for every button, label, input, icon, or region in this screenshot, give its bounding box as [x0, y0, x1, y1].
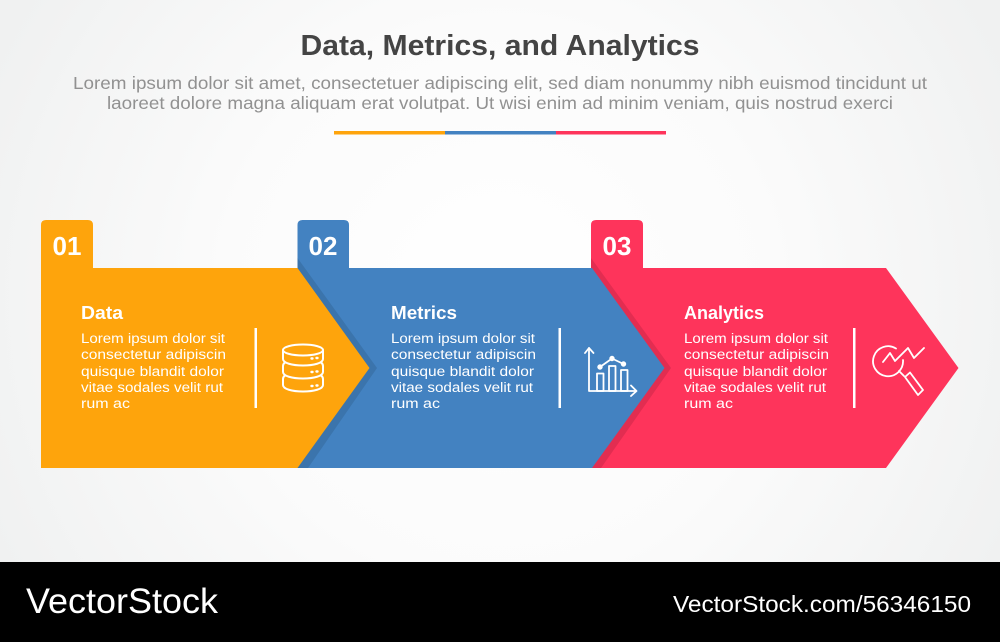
analytics arrow shadow — [591, 258, 671, 468]
analytics text block: vitae sodales velit rut — [684, 380, 826, 395]
panel: analytics arrow — [591, 220, 958, 468]
data text block: vitae sodales velit rut — [81, 380, 223, 395]
data divider — [254, 328, 257, 408]
number 03: 03 — [603, 231, 631, 261]
icon: database — [283, 344, 323, 392]
analytics heading: Analytics — [684, 303, 764, 323]
data text block: Lorem ipsum dolor sit — [81, 331, 225, 346]
subtitle text block — [73, 73, 927, 113]
subtitle text block: Lorem ipsum dolor sit amet, consectetuer adipiscing elit, sed diam nonummy nibh euismod tincidunt ut — [73, 73, 927, 93]
watermark url text: VectorStock.com/56346150 — [673, 591, 971, 617]
analytics text block: consectetur adipiscin — [684, 347, 829, 362]
title: Data, Metrics, and Analytics — [300, 30, 700, 62]
panel: data arrow — [41, 220, 370, 468]
data text block: rum ac — [81, 396, 130, 411]
metrics heading: Metrics — [391, 303, 457, 323]
subtitle text block: laoreet dolore magna aliquam erat volutpat. Ut wisi enim ad minim veniam, quis nostrud exerci — [107, 93, 893, 113]
metrics text block: quisque blandit dolor — [391, 364, 535, 379]
watermark logo text: VectorStock — [26, 582, 219, 621]
data heading: Data — [81, 303, 124, 323]
analytics text block: Lorem ipsum dolor sit — [684, 331, 828, 346]
data arrow body — [41, 220, 370, 468]
metrics divider — [558, 328, 561, 408]
metrics text block: consectetur adipiscin — [391, 347, 536, 362]
metrics text block: rum ac — [391, 396, 440, 411]
metrics arrow shadow — [298, 258, 377, 468]
data text block: consectetur adipiscin — [81, 347, 226, 362]
metrics text block: Lorem ipsum dolor sit — [391, 331, 535, 346]
analytics arrow body — [591, 220, 958, 468]
analytics text block: rum ac — [684, 396, 733, 411]
panel: metrics arrow — [298, 220, 664, 468]
number 02: 02 — [309, 231, 337, 261]
icon: bar chart with trend line — [585, 348, 636, 396]
analytics text block: quisque blandit dolor — [684, 364, 828, 379]
data text block — [81, 331, 226, 411]
data text block: quisque blandit dolor — [81, 364, 225, 379]
analytics divider — [853, 328, 856, 408]
metrics text block — [391, 331, 536, 411]
watermark bar — [0, 562, 1000, 642]
analytics text block — [684, 331, 829, 411]
metrics text block: vitae sodales velit rut — [391, 380, 533, 395]
tricolor divider — [334, 131, 666, 134]
icon: magnifier over trend line — [873, 346, 924, 395]
metrics arrow body — [298, 220, 664, 468]
number 01: 01 — [53, 231, 81, 261]
